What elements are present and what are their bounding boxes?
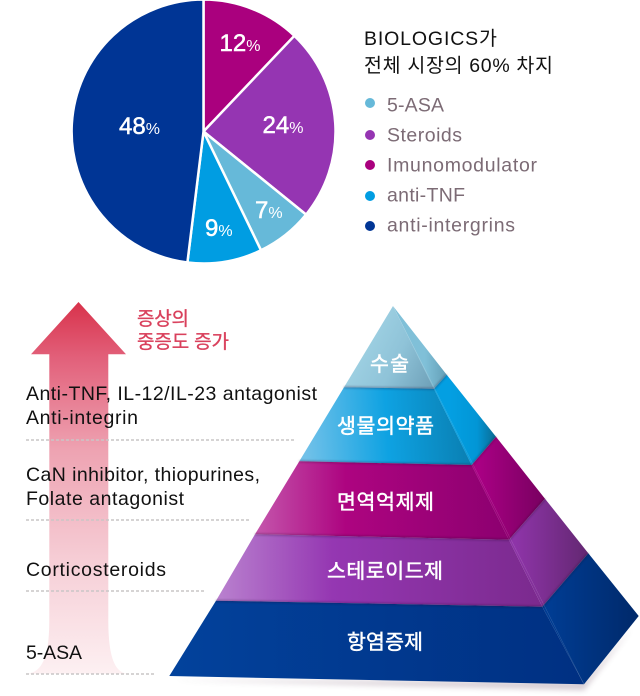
slice: anti-TNF 9% — [187, 132, 261, 263]
slice: 5-ASA 7% — [204, 132, 306, 250]
label: steroids: Corticosteroids — [26, 559, 166, 581]
legend heading: BIOLOGICS가 — [364, 28, 497, 50]
label: 5-ASA: 5-ASA — [26, 642, 82, 664]
tier label: 항염증제: 항염증제 — [347, 631, 423, 654]
arrow: increasing severity — [26, 302, 128, 674]
tier: surgery — [344, 306, 447, 389]
label 24%: 24% — [262, 112, 303, 139]
label 9%: 9% — [205, 215, 233, 242]
label: immunosuppressants — [26, 464, 260, 510]
slice: Steroids 24% — [204, 36, 336, 215]
label 12%: 12% — [220, 30, 260, 57]
tier: immunosuppressants — [255, 437, 545, 540]
label 48%: 48% — [119, 113, 160, 140]
legend heading — [364, 28, 553, 77]
legend item: anti-TNF: anti-TNF — [387, 184, 465, 206]
pie value labels — [119, 30, 303, 242]
legend item: Imunomodulator: Imunomodulator — [387, 154, 538, 176]
label: top tier drugs: Anti-integrin — [26, 407, 138, 429]
slice: anti-intergrins 48% — [72, 0, 204, 262]
legend item: 5-ASA: 5-ASA — [387, 94, 444, 116]
tier label: 생물의약품: 생물의약품 — [337, 415, 434, 438]
treatment labels — [26, 383, 318, 664]
pyramid — [169, 306, 639, 690]
label: top tier drugs: Anti-TNF, IL-12/IL-23 antagonist — [26, 383, 318, 405]
legend item: anti-intergrins: anti-intergrins — [387, 214, 515, 236]
severity heading: 증상의 — [137, 308, 189, 330]
legend item: Steroids: Steroids — [387, 124, 462, 146]
label 7%: 7% — [255, 197, 283, 224]
tier: steroids — [216, 499, 588, 607]
slice: Imunomodulator 12% — [204, 0, 294, 132]
tier label: 면역억제제: 면역억제제 — [337, 491, 434, 514]
severity heading — [137, 308, 229, 353]
legend — [365, 94, 538, 236]
tier label: 스테로이드제: 스테로이드제 — [327, 560, 443, 583]
tier label: 수술: 수술 — [370, 353, 409, 376]
label: top tier drugs — [26, 383, 318, 429]
severity heading: 중증도 증가 — [137, 331, 229, 353]
legend heading: 전체 시장의 60% 차지 — [364, 55, 553, 77]
pie chart: market share — [72, 0, 336, 263]
tier: biologics — [299, 375, 496, 465]
label: immunosuppressants: Folate antagonist — [26, 488, 185, 510]
tier: anti-inflammatory — [169, 553, 639, 684]
label: immunosuppressants: CaN inhibitor, thiopurines, — [26, 464, 260, 486]
